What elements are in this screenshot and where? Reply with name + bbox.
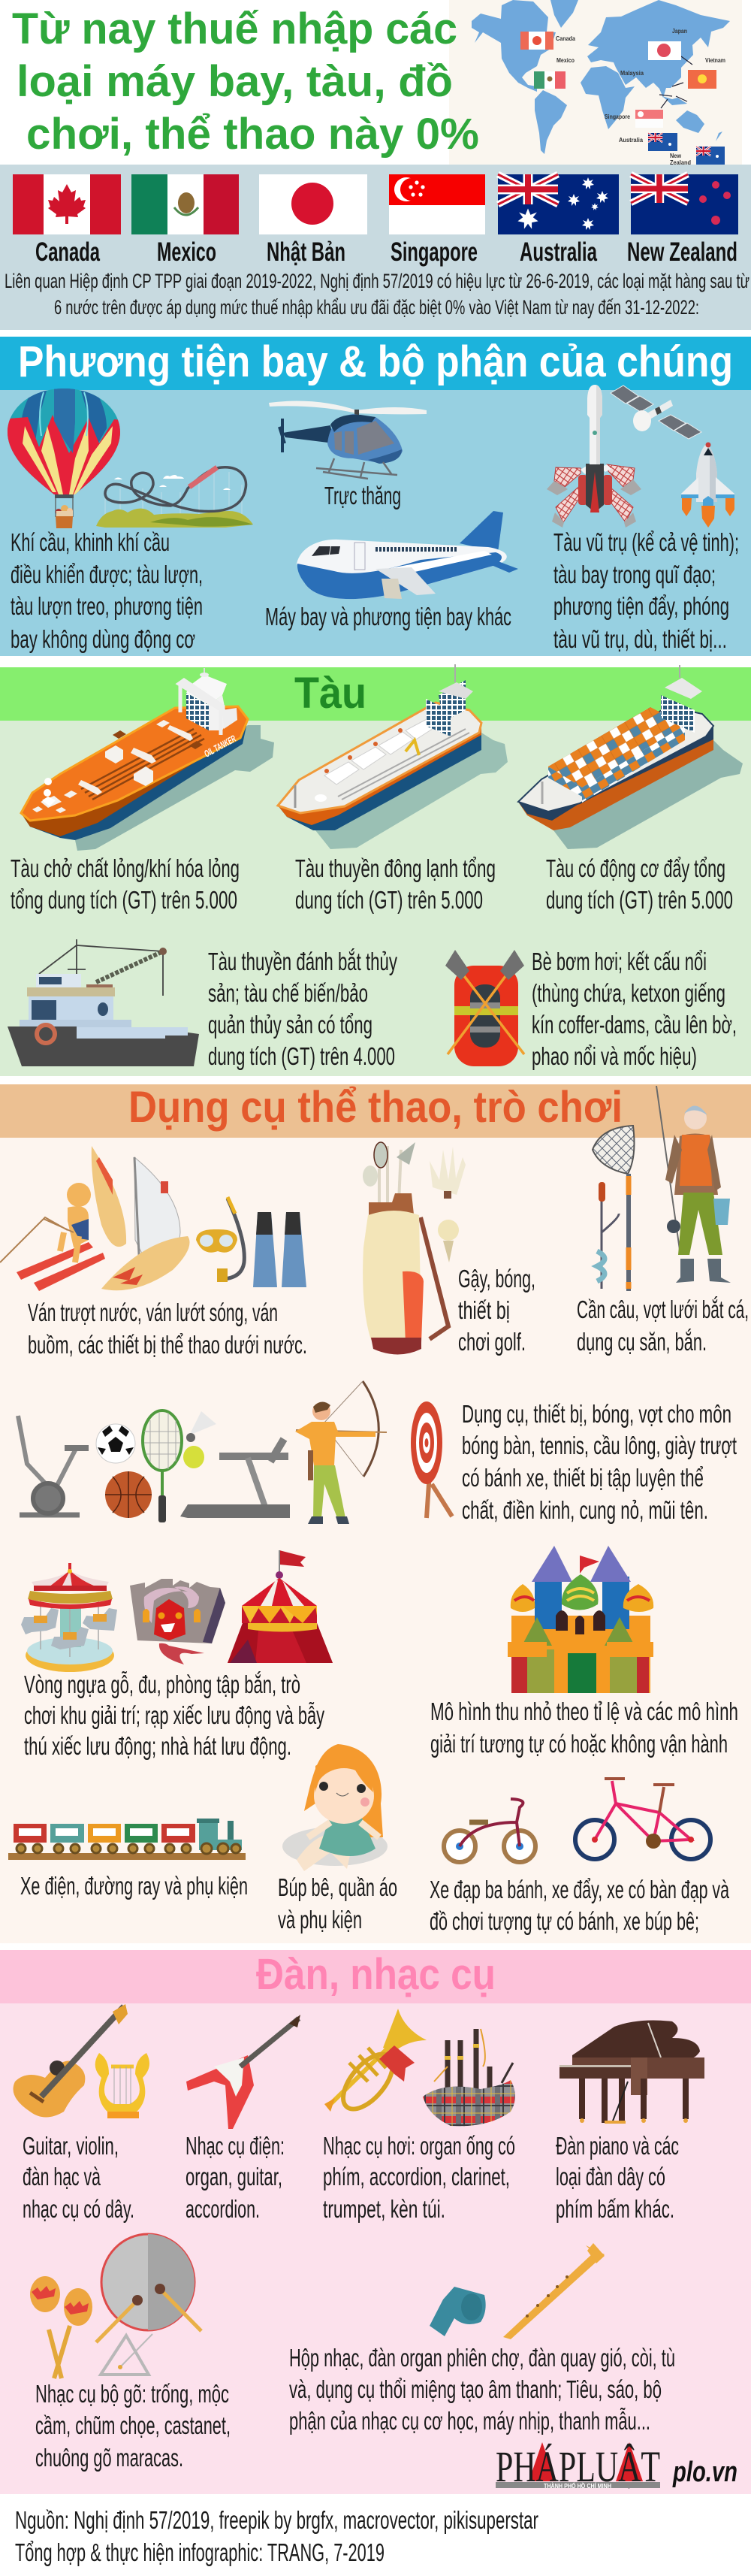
flag: Singapore	[389, 174, 485, 234]
text: guitar	[23, 2132, 134, 2223]
icon: surfboard and windsurf board	[92, 1146, 189, 1290]
text: golf: Gậy, bóng,	[458, 1265, 535, 1293]
text: ship 1: Tàu chở chất lỏng/khí hóa lỏng	[11, 854, 240, 882]
text: fishing	[577, 1296, 749, 1356]
text: doll: và phụ kiện	[278, 1906, 362, 1934]
title: Từ nay thuế nhập các	[12, 5, 457, 53]
icon: balance bike	[444, 1799, 535, 1862]
text: fishing boat: dung tích (GT) trên 4.000	[208, 1042, 395, 1070]
text: electric instruments: Nhạc cụ điện:	[185, 2132, 285, 2160]
text: ball sports	[462, 1400, 737, 1524]
heading: ships: Tàu	[294, 669, 366, 718]
map flag: Mexico	[534, 71, 566, 89]
text: carousel	[24, 1670, 324, 1760]
text: water sports	[28, 1299, 307, 1359]
icon: hot air balloon	[8, 389, 120, 528]
icon: fisherman	[656, 1086, 731, 1283]
icon: satellite	[611, 385, 701, 439]
map labels: New	[670, 153, 682, 159]
icon: helicopter	[269, 401, 427, 479]
logo: Pháp Luật: THÀNH PHỐ HỒ CHÍ MINH	[544, 2482, 611, 2490]
flag: Australia	[498, 174, 619, 234]
icon: exercise bike	[18, 1416, 89, 1515]
text: fishing boat: sản; tàu chế biến/bảo	[208, 979, 368, 1007]
icon: space shuttle	[681, 442, 734, 528]
icon: airplane	[297, 511, 518, 599]
map labels: Vietnam	[705, 57, 725, 64]
text: spacecraft	[553, 528, 739, 653]
map labels: Zealand	[670, 159, 691, 166]
icon: drum	[96, 2234, 201, 2342]
map flag: Japan	[648, 41, 681, 60]
text: piano: Đàn piano và các	[556, 2132, 679, 2160]
text: water sports: Ván trượt nước, ván lướt sóng, ván	[28, 1299, 278, 1326]
icon: roller coaster glider	[96, 467, 253, 528]
map flag: Singapore	[635, 110, 663, 128]
icon: fishing boat	[8, 939, 199, 1066]
text: piano	[556, 2132, 679, 2223]
text: percussion: chuông gõ maracas.	[35, 2444, 183, 2472]
icon: bicycle	[575, 1779, 710, 1859]
text: carousel: thú xiếc lưu động; nhà hát lưu động.	[24, 1732, 291, 1760]
icon: shooting gallery monster	[130, 1579, 225, 1664]
icon: circus tent	[228, 1550, 333, 1663]
title	[12, 5, 479, 159]
text: wind instruments: Nhạc cụ hơi: organ ống có	[323, 2132, 515, 2160]
icon: archer	[295, 1381, 387, 1524]
icon: archery target	[411, 1401, 452, 1518]
text: percussion	[35, 2380, 231, 2472]
text: bikes	[430, 1876, 729, 1935]
text: guitar: nhạc cụ có dây.	[23, 2195, 134, 2223]
title: loại máy bay, tàu, đồ	[17, 57, 453, 106]
panel: sports and games	[0, 1083, 751, 1943]
map labels: Mexico	[556, 57, 575, 64]
icon: shuttlecock	[186, 1411, 216, 1442]
icon: carousel	[21, 1563, 117, 1672]
panel: musical instruments	[0, 1950, 751, 2494]
icon: water skier	[0, 1183, 105, 1291]
text: balloons: tàu lượn treo, phương tiện	[11, 592, 203, 620]
heading: ships	[0, 667, 751, 721]
text: ship 1: tổng dung tích (GT) trên 5.000	[11, 886, 237, 914]
text: balloons	[11, 528, 203, 653]
flag: New Zealand	[631, 174, 738, 234]
heading: musical instruments: Đàn, nhạc cụ	[256, 1950, 496, 1999]
flag: Mexico	[131, 174, 239, 234]
text: other instruments	[289, 2344, 675, 2435]
icon: treadmill	[180, 1439, 290, 1518]
icon: grand piano	[559, 2021, 704, 2124]
map flag: Canada	[520, 32, 553, 50]
text: balloons: bay không dùng động cơ	[11, 625, 195, 653]
country names: Canada	[35, 237, 100, 267]
heading: musical instruments	[0, 1950, 751, 2003]
text: percussion: cầm, chũm chọe, castanet,	[35, 2411, 231, 2439]
map labels: Malaysia	[620, 70, 644, 77]
icon: maracas	[30, 2276, 92, 2378]
logo: Pháp Luật: PHÁPLUẬT	[496, 2442, 660, 2491]
icon: bagpipe	[423, 2029, 515, 2126]
icon: toy train	[8, 1819, 246, 1860]
icon: soccer ball	[96, 1424, 135, 1463]
icon: snorkel mask and fins	[196, 1197, 306, 1287]
text: guitar: Guitar, violin,	[23, 2132, 119, 2160]
text: ship 2	[295, 854, 496, 914]
text: piano: phím bấm khác.	[556, 2195, 674, 2223]
text: golf: chơi golf.	[458, 1328, 526, 1356]
panel: aircraft	[0, 337, 751, 656]
icon: golf glove	[430, 1147, 466, 1199]
icon: triangle	[101, 2334, 152, 2375]
map flag: New Zealand	[696, 147, 725, 165]
icon: basketball	[105, 1471, 152, 1518]
text: electric instruments	[185, 2132, 285, 2223]
icon: electric guitar	[186, 2015, 300, 2129]
country names: Australia	[520, 237, 597, 267]
icon: container ship	[518, 665, 743, 849]
icon: fishing net and auger	[593, 1126, 634, 1291]
map labels: Australia	[619, 137, 644, 144]
country names: Nhật Bản	[267, 237, 345, 267]
icon: inflatable raft	[445, 950, 524, 1066]
text: ship 2: Tàu thuyền đông lạnh tổng	[295, 854, 496, 882]
text: ship 1	[11, 854, 240, 914]
icon: golf bag and clubs	[363, 1142, 448, 1354]
source credits	[15, 2506, 538, 2566]
map labels: Japan	[672, 28, 687, 35]
text: fishing boat: quản thủy sản có tổng	[208, 1011, 372, 1039]
text: balloons: Khí cầu, khinh khí cầu	[11, 528, 170, 556]
icon: doll	[282, 1744, 388, 1871]
map flag: Australia	[648, 133, 677, 151]
icon: toy castle	[508, 1546, 653, 1693]
text: water sports: buồm, các thiết bị thể thao dưới nước.	[28, 1331, 307, 1359]
caption: airplane: Máy bay và phương tiện bay khác	[265, 603, 511, 630]
text: doll: Búp bê, quần áo	[278, 1873, 397, 1901]
map labels: Singapore	[605, 113, 630, 120]
icon: refrigerated ship	[278, 664, 508, 849]
country names	[35, 237, 737, 267]
text: carousel: chơi khu giải trí; rạp xiếc lưu động và bẫy	[24, 1701, 324, 1729]
text: guitar: đàn hạc và	[23, 2163, 101, 2191]
text: wind instruments: trumpet, kèn túi.	[323, 2195, 445, 2223]
text: electric instruments: accordion.	[185, 2195, 260, 2223]
caption: helicopter: Trực thăng	[324, 482, 401, 509]
text: doll	[278, 1873, 397, 1934]
text: balloons: điều khiển được; tàu lượn,	[11, 561, 203, 588]
heading: sports and games	[0, 1083, 751, 1138]
map labels	[556, 28, 725, 166]
text: wind instruments: phím, accordion, clarinet,	[323, 2163, 510, 2191]
text: golf: thiết bị	[458, 1296, 510, 1324]
text: ship 3	[546, 854, 733, 914]
icon: oil tanker: OIL TANKER	[202, 733, 238, 760]
text: wind instruments	[323, 2132, 515, 2223]
heading: sports and games: Dụng cụ thể thao, trò chơi	[128, 1083, 623, 1132]
text: raft	[532, 948, 737, 1070]
country names: Singapore	[391, 237, 478, 267]
text: models	[430, 1698, 738, 1758]
icon: flute	[503, 2243, 605, 2339]
icon: oil tanker	[21, 668, 274, 851]
source credits: Tổng hợp & thực hiện infographic: TRANG, 7-2019	[15, 2538, 385, 2566]
text: electric instruments: organ, guitar,	[185, 2163, 282, 2191]
country names: Mexico	[157, 237, 216, 267]
icon: launch rocket	[547, 385, 641, 528]
icon: whistle	[430, 2287, 486, 2336]
icon: guitar	[14, 2004, 128, 2118]
panel: ships	[0, 664, 751, 1076]
text: golf	[458, 1265, 535, 1356]
icon: golf ball and tee	[438, 1220, 459, 1262]
icon: lyre	[95, 2053, 149, 2118]
flag: Canada	[13, 174, 121, 234]
icon: trumpet	[324, 2009, 427, 2118]
intro text	[5, 270, 749, 319]
world map with flags of member countries	[449, 0, 742, 166]
map flag: Vietnam	[688, 70, 716, 89]
icon: tennis ball	[183, 1446, 204, 1468]
map labels: Canada	[556, 35, 575, 42]
text: fishing boat	[208, 948, 397, 1070]
text: percussion: Nhạc cụ bộ gõ: trống, mộc	[35, 2380, 229, 2408]
text: carousel: Vòng ngựa gỗ, đu, phòng tập bắn, trò	[24, 1670, 300, 1698]
text: train: Xe điện, đường ray và phụ kiện	[20, 1872, 248, 1900]
title: chơi, thể thao này 0%	[26, 110, 479, 159]
text: fishing boat: Tàu thuyền đánh bắt thủy	[208, 948, 397, 975]
text: piano: loại đàn dây có	[556, 2163, 665, 2191]
text: ship 2: dung tích (GT) trên 5.000	[295, 886, 483, 914]
flag: Japan	[259, 174, 367, 234]
panel: countries and flags	[0, 165, 751, 330]
icon: tennis racket	[143, 1410, 182, 1522]
